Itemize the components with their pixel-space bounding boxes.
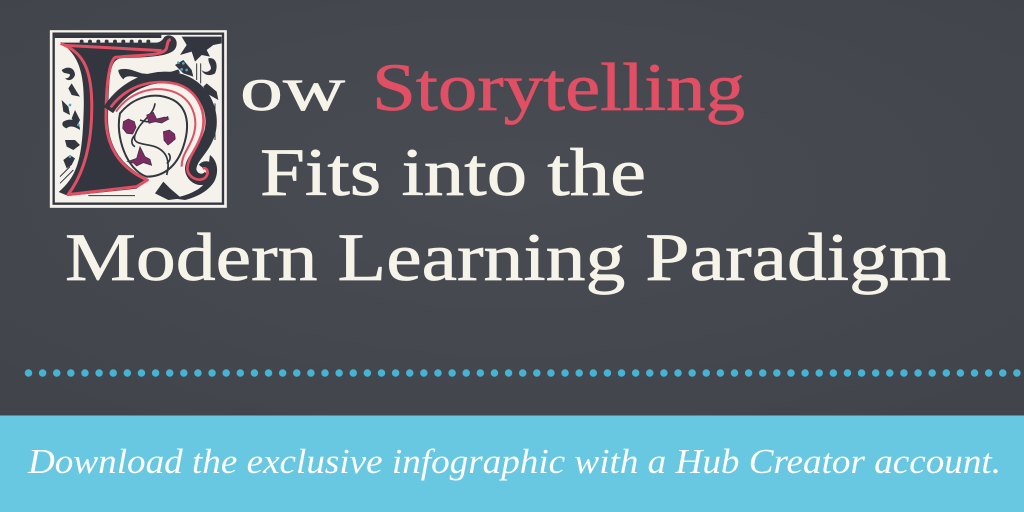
heading text: Modern Learning Paradigm: Modern Learning Paradigm [65,219,951,295]
icon: illuminated letter H [51,31,226,207]
heading text: ow: ow [240,53,345,124]
heading: title [65,49,951,295]
heading text: Fits into the: Fits into the [260,134,646,210]
call-to-action text: Download the exclusive infographic with a Hub Creator account. [27,442,1001,481]
dotted divider [28,369,1022,377]
heading text: Storytelling: Storytelling [372,49,745,125]
panel: call-to-action band [0,416,1024,512]
